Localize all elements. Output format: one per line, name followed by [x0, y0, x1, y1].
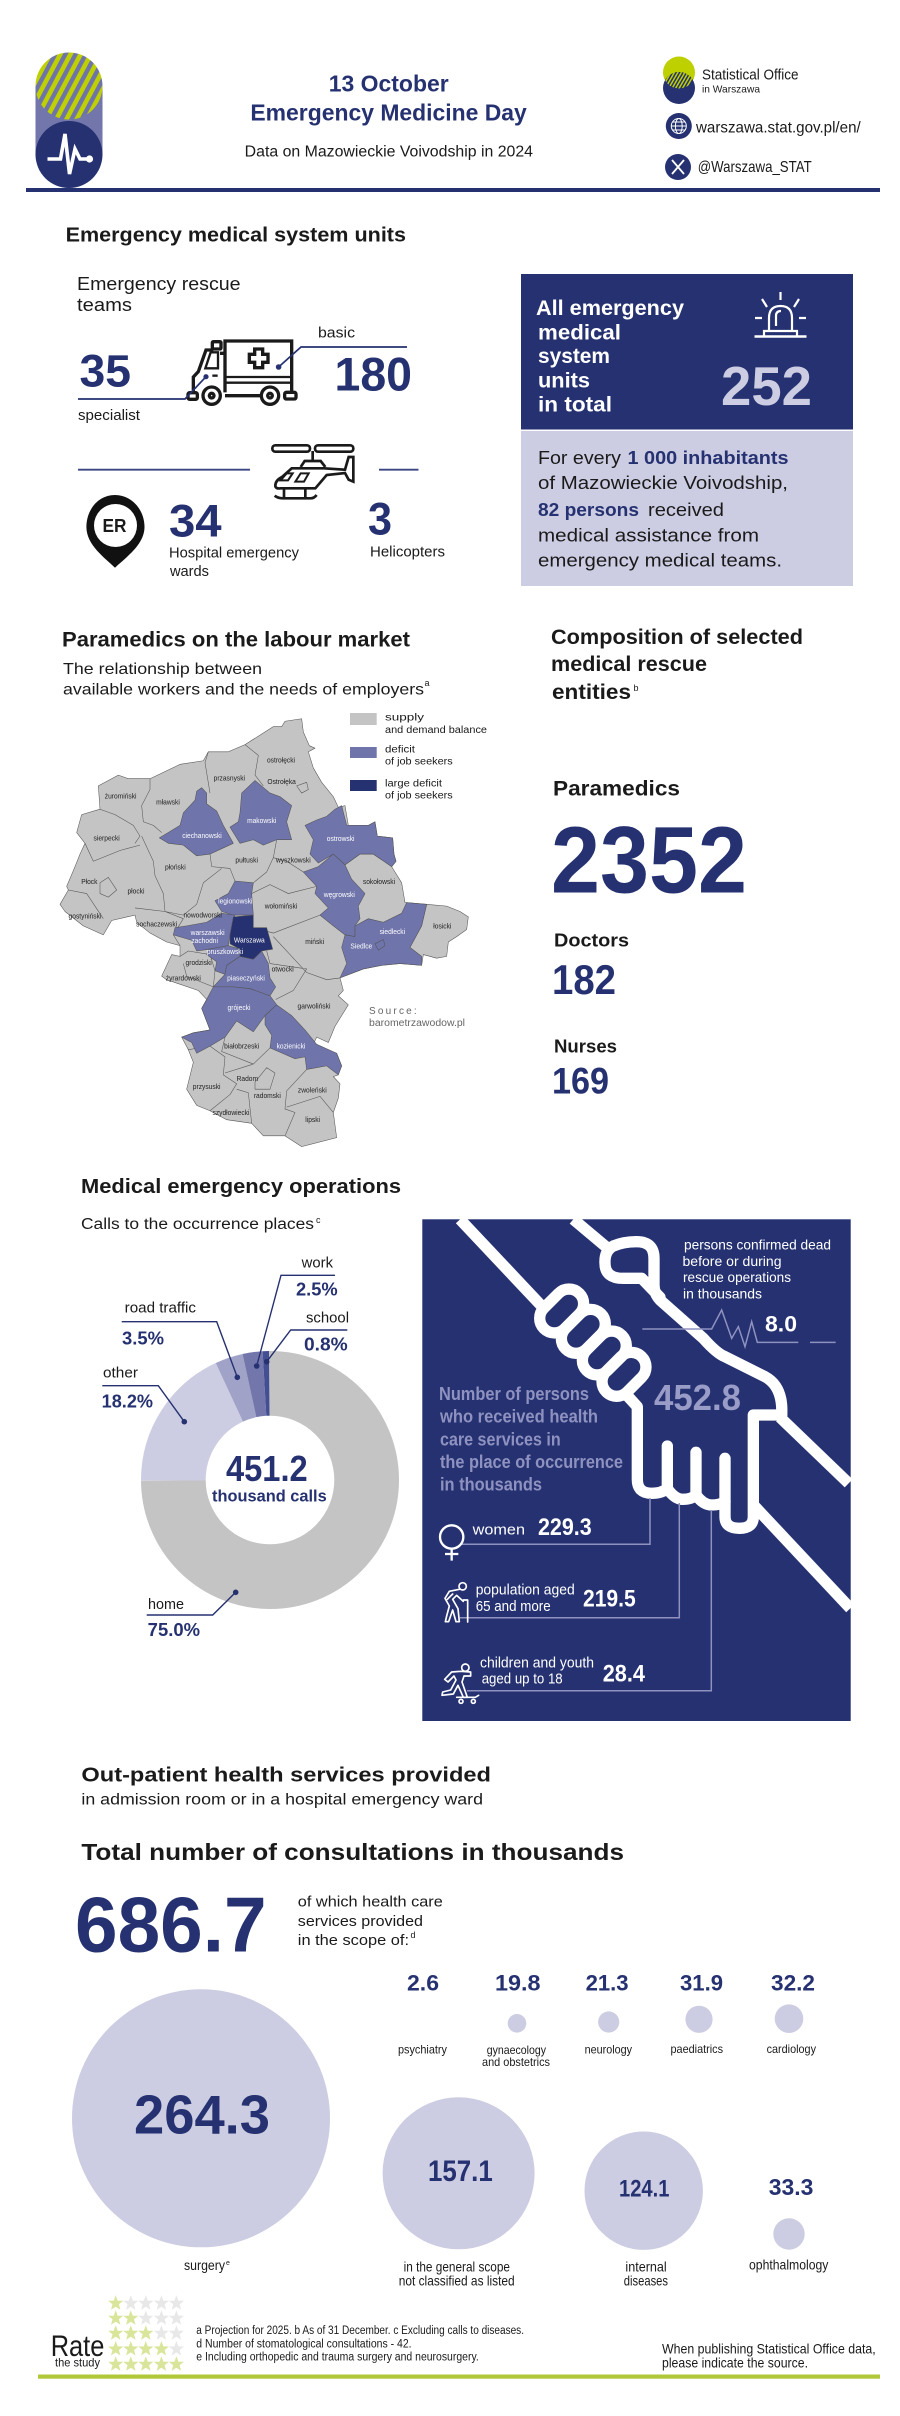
map legend: supply	[385, 712, 424, 724]
statistical office logo: in Warszawa	[702, 84, 760, 96]
map: district labels: żyrardowski	[166, 975, 201, 982]
map legend	[350, 712, 487, 801]
bubble: paediatrics	[670, 1971, 723, 2056]
bubble: psychiatry: 2.6	[407, 1971, 439, 1996]
callout: school: 0.8%	[304, 1335, 348, 1355]
section heading: medical emergency operations: Calls to the occurrence places	[81, 1216, 314, 1233]
x account: @Warszawa_STAT	[698, 159, 812, 176]
value: specialist: specialist	[78, 408, 140, 424]
bubble: internal diseases: 124.1	[619, 2176, 669, 2203]
section heading: medical emergency operations	[81, 1175, 401, 1233]
value: total 686.7	[75, 1881, 443, 1969]
value: nurses: Nurses	[554, 1036, 617, 1057]
item: population 65 and more	[445, 1581, 636, 1622]
rate the study: the study	[55, 2356, 100, 2370]
value: doctors: 182	[552, 956, 616, 1003]
panel: assistance per 1000 inhabitants: 1 000 inhabitants	[628, 448, 788, 468]
bubble: neurology: neurology	[585, 2043, 632, 2057]
panel: assistance per 1000 inhabitants: 82 persons	[538, 500, 639, 520]
item: children and youth	[442, 1654, 646, 1703]
panel: assistance per 1000 inhabitants	[521, 431, 853, 586]
section heading: paramedics: a	[424, 678, 430, 688]
map: district labels: wołomiński	[264, 903, 298, 911]
value: specialist: 35	[80, 346, 131, 397]
bubble: paediatrics: 31.9	[680, 1971, 723, 1996]
map: district labels: miński	[305, 939, 325, 946]
map: district labels: siedlecki	[380, 929, 406, 936]
item: population 65 and more: 219.5	[583, 1586, 636, 1613]
bubble: cardiology: 32.2	[771, 1971, 815, 1996]
bubble: internal diseases: diseases	[624, 2273, 668, 2289]
rate the study: Rate	[51, 2330, 104, 2363]
callout: home: 75.0%	[148, 1620, 200, 1640]
value: hospital wards	[169, 496, 300, 580]
value: hospital wards: Hospital emergency	[169, 546, 300, 562]
map: district labels: grójecki	[228, 1005, 251, 1012]
item: children and youth: aged up to 18	[482, 1671, 563, 1688]
value: specialist	[78, 346, 209, 424]
value: basic	[276, 326, 412, 401]
bubble: gynaecology and obstetrics	[482, 1971, 550, 2069]
bubble: general scope: in the general scope	[404, 2259, 510, 2275]
callout: other: other	[103, 1366, 138, 1382]
map: district labels: warszawski	[190, 930, 225, 937]
bubble: surgery: 264.3	[134, 2083, 270, 2145]
icon: elderly person with cane	[445, 1583, 468, 1622]
source note: please indicate the source.	[662, 2355, 808, 2371]
panel heading: medical	[538, 321, 621, 344]
map: deficit districts	[159, 780, 427, 1075]
rescue teams block	[77, 274, 445, 580]
section heading: medical emergency operations: c	[316, 1215, 321, 1225]
callout: other: 18.2%	[102, 1392, 153, 1412]
logo: pill with pulse	[36, 52, 102, 188]
map: district labels: otwocki	[272, 966, 294, 974]
panel: assistance per 1000 inhabitants: of Mazowieckie Voivodship,	[538, 473, 788, 493]
map: district labels: Płock	[81, 879, 98, 886]
map: district labels	[69, 757, 452, 1124]
value: helicopters	[368, 494, 445, 561]
bubble: general scope	[383, 2097, 535, 2289]
map: district labels: sierpecki	[94, 835, 120, 843]
bubble: surgery: surgery	[184, 2257, 225, 2273]
value: total 252: 252	[721, 355, 812, 417]
bubble: gynaecology and obstetrics: 19.8	[495, 1971, 540, 1996]
statistical office logo: Statistical Office	[702, 66, 798, 83]
callout: work: work	[301, 1256, 334, 1272]
text: persons confirmed dead: before or during	[682, 1253, 782, 1269]
donut centre value: 451.2	[226, 1448, 308, 1489]
map: district labels: zachodni	[191, 938, 218, 945]
panel: all units total	[521, 274, 853, 430]
section heading: paramedics	[62, 629, 430, 698]
panel heading	[536, 297, 684, 417]
bubble: psychiatry: psychiatry	[398, 2042, 447, 2056]
section heading: paramedics: Paramedics on the labour market	[62, 629, 410, 652]
callout: work	[254, 1256, 338, 1369]
section heading: medical emergency operations: Medical emergency operations	[81, 1175, 401, 1198]
value: 452.8: 452.8	[654, 1377, 741, 1418]
section heading: out-patient services: Out-patient health services provided	[81, 1764, 491, 1787]
text: number of persons: Number of persons	[439, 1384, 589, 1404]
composition block	[551, 626, 803, 1101]
value: total 686.7: d	[410, 1930, 416, 1940]
callout: road traffic: road traffic	[125, 1300, 196, 1316]
header	[36, 52, 861, 188]
bubble: surgery: e	[226, 2260, 230, 2267]
bubble: general scope: not classified as listed	[399, 2273, 515, 2289]
bubble: internal diseases: internal	[625, 2259, 667, 2275]
value: hospital wards: wards	[169, 564, 209, 580]
map: district labels: makowski	[247, 818, 277, 825]
map: district labels: Radom	[237, 1076, 258, 1083]
heading: composition: entities	[552, 681, 631, 704]
leader lines	[460, 1498, 711, 1691]
value: nurses: 169	[552, 1060, 609, 1101]
map: district labels: piaseczyński	[227, 975, 265, 982]
donut chart	[102, 1256, 367, 1640]
panel heading: All emergency	[536, 297, 684, 320]
icon: female symbol	[440, 1525, 463, 1561]
icon: skateboarder	[442, 1664, 479, 1703]
value: nurses	[552, 1036, 617, 1101]
map: district labels: legionowski	[218, 898, 253, 905]
map source: barometrzawodow.pl	[369, 1018, 465, 1029]
map: district labels: przysuski	[193, 1084, 221, 1091]
icon: helicopter	[272, 445, 353, 498]
callout: road traffic	[122, 1300, 240, 1380]
heading: composition	[551, 626, 803, 704]
map: district labels: szydłowiecki	[213, 1110, 250, 1117]
text: number of persons: care services in	[440, 1429, 561, 1449]
bubble: ophthalmology	[749, 2174, 828, 2272]
map: district labels: garwoliński	[298, 1003, 331, 1010]
map: district labels: płocki	[127, 888, 145, 896]
donut centre value	[212, 1448, 327, 1506]
map: district labels: radomski	[254, 1093, 281, 1100]
bubble: neurology: 21.3	[586, 1971, 629, 1996]
map: district labels: Ostrołęka	[267, 779, 296, 786]
bubble: paediatrics: paediatrics	[670, 2042, 723, 2056]
bubble: gynaecology and obstetrics: and obstetrics	[482, 2055, 550, 2069]
callout: other	[102, 1366, 187, 1424]
footnotes: a Projection for 2025. b As of 31 December. c Excluding calls to diseases.	[196, 2325, 524, 2337]
bubble: gynaecology and obstetrics: gynaecology	[487, 2043, 546, 2057]
value: basic: basic	[318, 326, 355, 342]
map: district labels: nowodworski	[183, 912, 222, 920]
subtitle: Data on Mazowieckie Voivodship in 2024	[245, 144, 533, 161]
value: helicopters: 3	[368, 494, 392, 545]
map source: Source:	[369, 1006, 417, 1017]
item: children and youth: children and youth	[480, 1654, 594, 1671]
text: persons confirmed dead: rescue operations	[683, 1269, 791, 1285]
section heading: paramedics: The relationship between	[63, 661, 262, 678]
map: district labels: gostyniński	[69, 913, 102, 920]
map: district labels: ostrowski	[327, 836, 355, 843]
map: district labels: ostrołęcki	[267, 757, 295, 765]
map: district labels: płoński	[165, 864, 186, 872]
icon: ER pin: ER	[102, 516, 126, 536]
panel: assistance per 1000 inhabitants: emergency medical teams.	[538, 551, 782, 571]
bubble: general scope: 157.1	[428, 2155, 493, 2188]
value: helicopters: Helicopters	[370, 545, 445, 561]
text: number of persons: in thousands	[440, 1475, 542, 1495]
text: number of persons: who received health	[439, 1407, 598, 1427]
panel: assistance per 1000 inhabitants: received	[648, 500, 724, 520]
map: district labels: Siedlce	[350, 943, 372, 951]
value: basic: 180	[334, 348, 412, 401]
section heading: total consultations: Total number of consultations in thousands	[81, 1839, 624, 1865]
map: district labels: zwoleński	[298, 1087, 327, 1094]
map: district labels: grodziski	[186, 960, 212, 967]
bubble: cardiology: cardiology	[767, 2042, 816, 2056]
bubble: internal diseases	[584, 2132, 703, 2289]
map: district labels: węgrowski	[323, 892, 355, 899]
item: children and youth: 28.4	[603, 1661, 646, 1688]
value: total 686.7: of which health care	[298, 1894, 443, 1911]
source note: When publishing Statistical Office data,	[662, 2340, 876, 2356]
map: district labels: kozienicki	[277, 1043, 306, 1051]
section heading: out-patient services: in admission room or in a hospital emergency ward	[81, 1791, 483, 1808]
map: district labels: sokołowski	[363, 879, 396, 886]
value: paramedics: Paramedics	[553, 776, 680, 800]
footnotes: d Number of stomatological consultations - 42.	[196, 2339, 412, 2351]
pulse line with value 8.0	[642, 1310, 836, 1347]
item: women: women	[472, 1521, 525, 1538]
map: district labels: sochaczewski	[136, 921, 178, 929]
footnotes	[196, 2325, 524, 2364]
map legend: of job seekers	[385, 790, 453, 801]
map legend: and demand balance	[385, 725, 487, 736]
map: internal boundaries	[68, 745, 427, 1136]
panel heading: units	[538, 370, 590, 393]
map of Mazowieckie powiats	[60, 719, 468, 1147]
map: district labels: Warszawa	[234, 937, 265, 944]
donut centre value: thousand calls	[212, 1487, 327, 1506]
section heading: out-patient services	[81, 1764, 491, 1808]
bubble: neurology	[585, 1971, 632, 2057]
callout: home: home	[148, 1597, 184, 1613]
item: population 65 and more: population aged	[476, 1581, 575, 1598]
map: district labels: ciechanowski	[182, 833, 222, 840]
illustration: clasped hands	[460, 1219, 850, 1608]
panel: assistance per 1000 inhabitants: medical assistance from	[538, 526, 759, 546]
heading: composition: Composition of selected	[551, 626, 803, 649]
map: district labels: przasnyski	[214, 775, 245, 783]
icon: siren	[754, 292, 806, 336]
map source	[369, 1006, 465, 1029]
map legend: of job seekers	[385, 757, 453, 768]
item: population 65 and more: 65 and more	[476, 1598, 551, 1615]
heading: composition: medical rescue	[551, 653, 707, 676]
item: women: 229.3	[538, 1514, 592, 1541]
title: Emergency Medicine Day	[250, 100, 527, 126]
callout: work: 2.5%	[296, 1280, 338, 1300]
statistical office logo	[663, 56, 798, 104]
map: Warszawa large deficit	[230, 915, 273, 959]
map legend: large deficit	[385, 779, 442, 790]
text: number of persons: the place of occurrence	[440, 1452, 623, 1472]
icon: ER pin	[86, 495, 144, 568]
map: district labels: łosicki	[433, 924, 452, 931]
footnotes: e Including orthopedic and trauma surgery and neurosurgery.	[196, 2352, 479, 2364]
title: 13 October	[329, 71, 449, 97]
callout: home	[147, 1590, 238, 1640]
value: total 686.7: services provided	[298, 1913, 423, 1930]
panel: persons who received care	[422, 1219, 851, 1721]
map: district labels: pułtuski	[235, 857, 258, 864]
text: persons confirmed dead: in thousands	[683, 1285, 762, 1301]
value: total 686.7: in the scope of:	[298, 1932, 409, 1949]
map: district labels: żuromiński	[105, 793, 137, 801]
heading: rescue teams: teams	[77, 295, 132, 315]
map: district labels: białobrzeski	[224, 1043, 260, 1050]
callout: school	[264, 1311, 349, 1364]
section heading: paramedics: available workers and the needs of employers	[63, 681, 424, 698]
bubble: ophthalmology: 33.3	[769, 2174, 813, 2200]
icon: rating stars	[108, 2295, 184, 2371]
callout: road traffic: 3.5%	[122, 1328, 164, 1348]
value: total 686.7: 686.7	[75, 1881, 267, 1969]
map: district labels: lipski	[305, 1117, 320, 1124]
map: district labels: mławski	[156, 799, 180, 807]
text: persons confirmed dead	[682, 1236, 831, 1301]
value: doctors	[552, 930, 629, 1003]
bubble: surgery	[72, 1989, 330, 2273]
bubble: ophthalmology: ophthalmology	[749, 2256, 828, 2272]
map: district labels: pruszkowski	[207, 949, 244, 956]
heading: rescue teams	[77, 274, 241, 315]
bubble: cardiology	[767, 1971, 816, 2056]
map legend: deficit	[385, 744, 415, 756]
value: doctors: Doctors	[554, 930, 629, 951]
x account	[665, 154, 812, 180]
pulse line with value 8.0: 8.0	[765, 1312, 797, 1337]
map: region silhouette	[60, 719, 468, 1147]
callout: school: school	[306, 1311, 349, 1327]
heading: rescue teams: Emergency rescue	[77, 274, 241, 294]
map: district labels: wyszkowski	[275, 857, 311, 864]
panel: assistance per 1000 inhabitants: For every	[538, 448, 621, 468]
text: persons confirmed dead: persons confirmed dead	[684, 1236, 831, 1252]
title	[250, 71, 527, 126]
value: hospital wards: 34	[169, 496, 222, 547]
icon: ambulance	[188, 341, 296, 404]
heading: composition: b	[634, 683, 639, 693]
text: number of persons	[439, 1384, 623, 1495]
item: women	[440, 1514, 592, 1561]
panel heading: system	[538, 345, 610, 368]
bubble: psychiatry	[398, 1971, 447, 2056]
panel heading: in total	[538, 394, 612, 417]
website	[666, 113, 861, 139]
section heading: emergency units: Emergency medical system units	[66, 224, 406, 247]
source note	[662, 2340, 876, 2371]
website: warszawa.stat.gov.pl/en/	[695, 119, 861, 136]
rate the study	[51, 2295, 184, 2371]
value: paramedics: 2352	[551, 808, 747, 914]
